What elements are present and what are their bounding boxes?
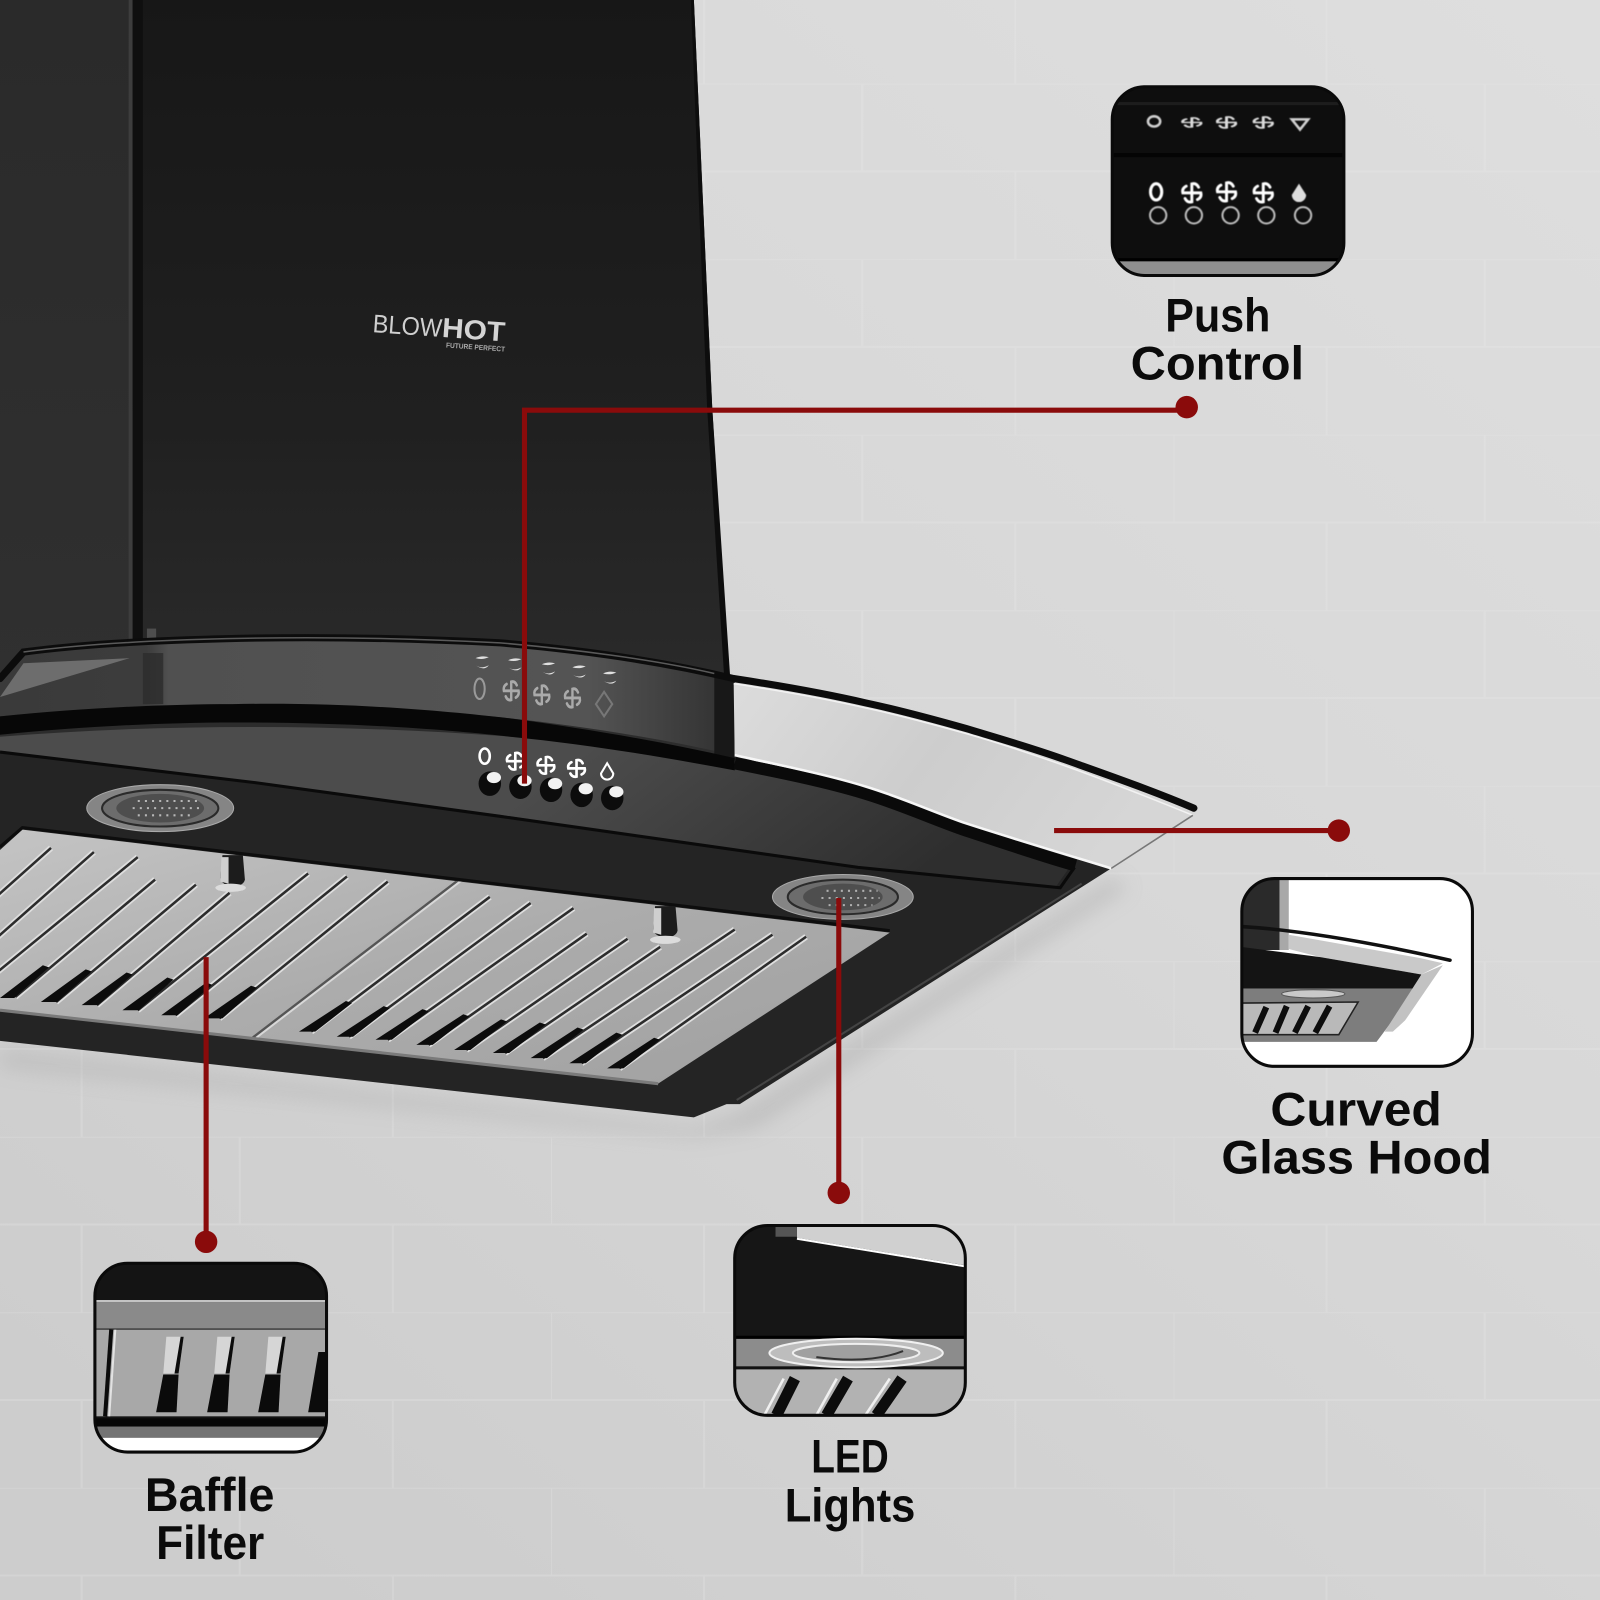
control panel icons — [480, 748, 613, 780]
callout line: curved glass hood — [1054, 819, 1350, 842]
brand logo: HOT — [441, 312, 507, 347]
callout line: push control — [524, 396, 1198, 784]
label: baffle filter: Baffle — [145, 1469, 274, 1521]
callout line: baffle filter — [195, 957, 217, 1253]
brand logo: FUTURE PERFECT — [446, 341, 506, 354]
thumbnail: push control — [1112, 87, 1344, 276]
label: LED lights — [785, 1430, 915, 1531]
brand logo: BLOW — [372, 310, 443, 343]
underside black body — [0, 745, 1111, 1117]
hood shadow on wall — [0, 878, 1128, 1138]
label: push control: Push — [1165, 290, 1270, 342]
filter knob right — [650, 906, 681, 944]
black arc under glass — [0, 704, 735, 770]
label: push control: Control — [1131, 338, 1304, 390]
curved glass: dark section — [0, 640, 734, 755]
thumbnail: curved glass hood — [1242, 879, 1472, 1066]
label: baffle filter — [145, 1469, 274, 1569]
side trim line — [737, 884, 1082, 1100]
LED light left — [87, 785, 234, 832]
thumbnail: LED lights — [735, 1226, 965, 1415]
push buttons — [479, 771, 623, 810]
label: curved glass hood: Curved — [1270, 1084, 1442, 1136]
glass light reflection triangle — [0, 658, 130, 697]
filter knob left — [215, 855, 246, 892]
chimney hood product — [0, 0, 1194, 1117]
thumbnail: baffle filter — [95, 1263, 329, 1453]
hood tower — [0, 0, 735, 776]
upper glass indicator icons — [474, 656, 616, 716]
LED light right — [772, 874, 913, 919]
black glass rail — [0, 638, 1194, 808]
label: push control — [1131, 290, 1304, 390]
label: curved glass hood — [1221, 1084, 1492, 1183]
curved glass: silver section — [734, 684, 1193, 868]
brand logo — [371, 307, 508, 354]
label: baffle filter: Filter — [156, 1517, 264, 1569]
glass column reflection — [143, 653, 163, 704]
baffle filter plates — [0, 828, 890, 1084]
front panel with buttons — [0, 727, 1074, 888]
black band along glass edge — [735, 763, 1076, 865]
callout line: LED lights — [828, 898, 850, 1204]
label: LED lights: Lights — [785, 1479, 915, 1531]
label: curved glass hood: Glass Hood — [1221, 1131, 1492, 1183]
label: LED lights: LED — [811, 1430, 889, 1482]
dark tower reflection in glass — [714, 678, 735, 760]
